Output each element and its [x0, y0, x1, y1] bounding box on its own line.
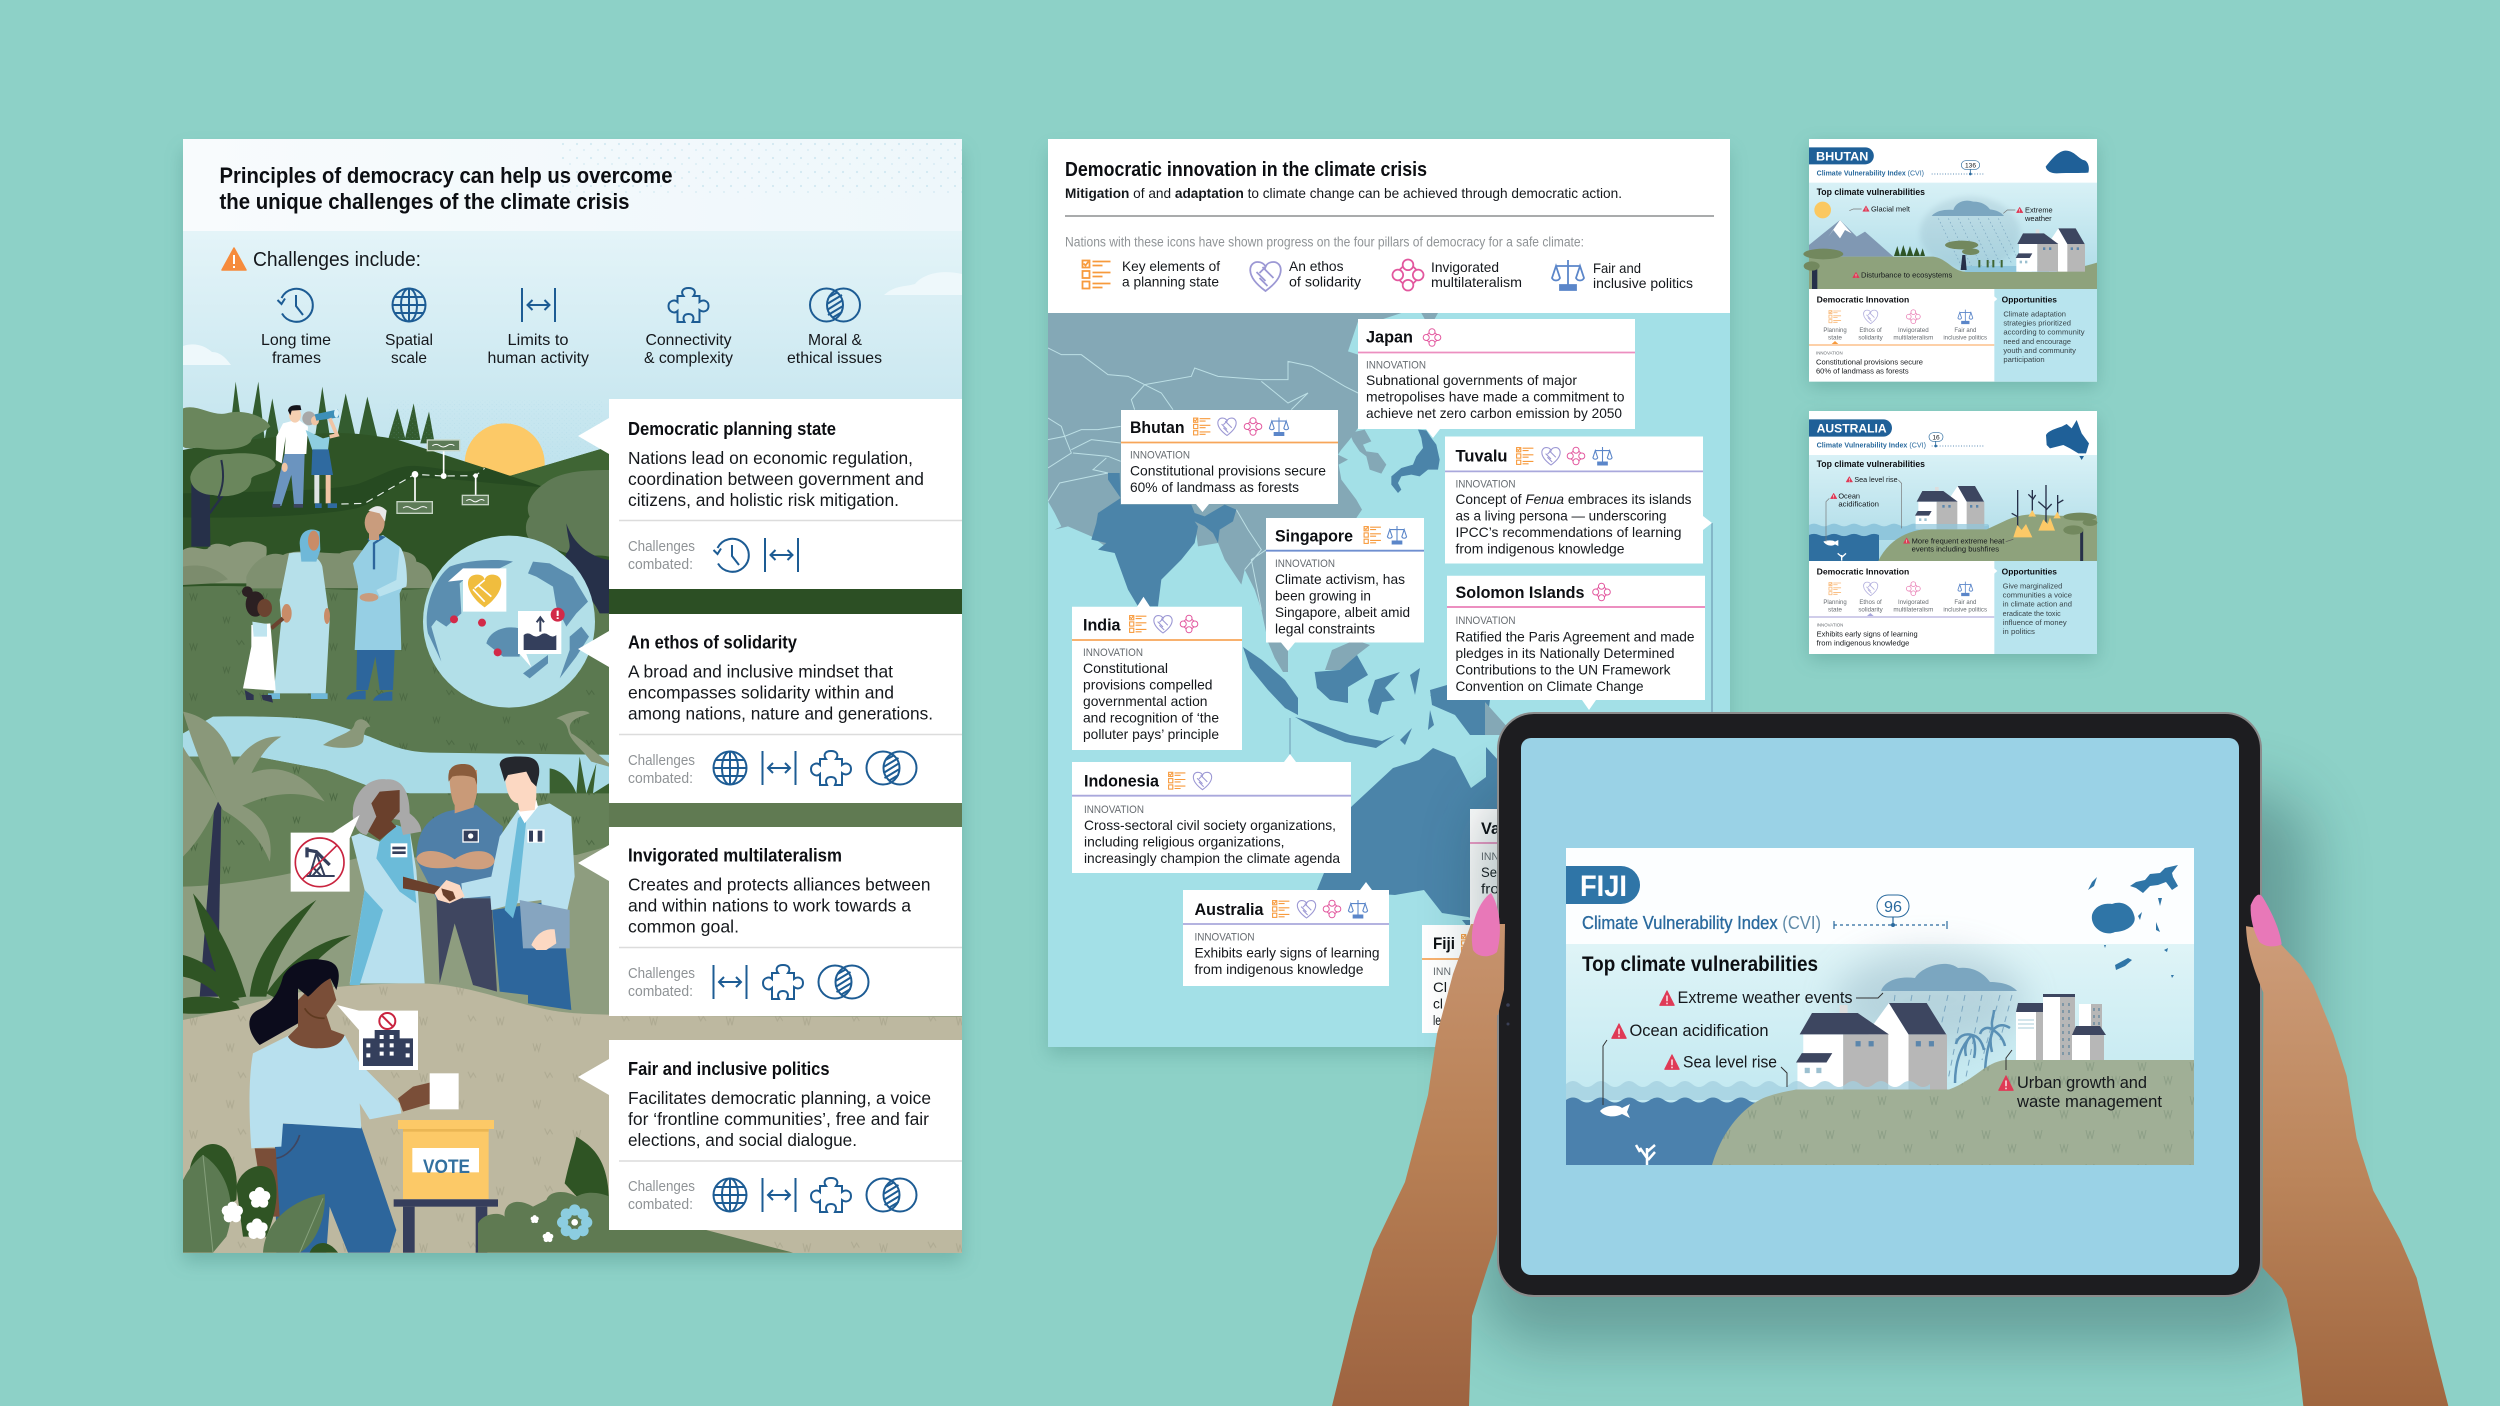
card: Bhutan: Bhutan	[1130, 418, 1184, 437]
opportunities section: Opportunities	[2002, 567, 2057, 577]
index scale: 96	[1884, 899, 1902, 916]
card: Solomon Islands: Ratified the Paris Agreement and made	[1456, 628, 1695, 644]
card: an ethos of solidarity: combated:	[628, 771, 693, 787]
legend: planning state: a planning state	[1122, 274, 1219, 290]
card: Australia	[1183, 882, 1389, 986]
challenge: moral and ethical issues: Moral &	[808, 332, 862, 349]
card: democratic planning state: combated:	[628, 557, 693, 573]
label: glacial melt	[1849, 204, 1910, 213]
left hand	[1332, 924, 1505, 1406]
card: Singapore: legal constraints	[1275, 620, 1375, 636]
panel shadow	[1809, 145, 2097, 387]
map heading: Nations with these icons have shown progress on the four pillars of democracy for a safe climate:	[1065, 234, 1584, 250]
card: Vanuatu: fro	[1481, 880, 1499, 896]
card: Australia: Exhibits early signs of learning	[1194, 945, 1380, 961]
card: democratic planning state: Democratic planning state	[628, 418, 836, 439]
card: India: governmental action	[1083, 693, 1208, 709]
Fiji map	[2088, 865, 2178, 978]
challenge: limits to human activity: Limits to	[508, 332, 569, 349]
legend: solidarity	[1250, 258, 1361, 291]
Bhutan drawing in magnified units	[1803, 139, 2097, 382]
card: fair and inclusive politics: Fair and inclusive politics	[628, 1058, 830, 1079]
label: extreme weather	[2003, 206, 2053, 223]
card: invigorated multilateralism: Creates and protects alliances between	[628, 874, 930, 894]
challenge: moral and ethical issues	[787, 288, 882, 367]
Bhutan landscape	[1803, 197, 2097, 289]
title: Principles of democracy can help us overcome	[220, 163, 672, 188]
card: Solomon Islands: INNOVATION	[1456, 615, 1516, 627]
democratic innovation section: Ethos of	[1859, 600, 1882, 606]
card: Tuvalu	[1445, 436, 1712, 712]
opportunities section: participation	[2003, 357, 2045, 364]
card: Japan: Japan	[1366, 328, 1413, 346]
name pill	[1809, 419, 1892, 437]
globe with speech bubbles	[423, 536, 595, 708]
panel: principles of democracy	[180, 139, 963, 1263]
name: AUSTRALIA	[1817, 422, 1887, 436]
label: ocean acidification: Ocean acidification	[1630, 1021, 1768, 1040]
card: Singapore: Singapore	[1275, 526, 1353, 546]
index scale: 136	[1965, 162, 1976, 169]
right thumb over tablet edge	[2246, 895, 2313, 1017]
opportunities section: in climate action and	[2003, 602, 2072, 609]
challenge: connectivity and complexity	[644, 288, 733, 367]
card: India: INNOVATION	[1083, 647, 1143, 659]
card: Singapore: Climate activism, has	[1275, 571, 1405, 587]
democratic innovation section	[1809, 295, 1994, 375]
climate vulnerability index: Climate Vulnerability Index (CVI)	[1817, 441, 1926, 450]
legend: multilateralism: Invigorated	[1431, 259, 1499, 275]
header background	[1048, 139, 1730, 313]
legend: fair politics: Fair and	[1593, 260, 1641, 276]
challenges heading: Challenges include:	[253, 249, 421, 271]
democratic innovation section: state	[1828, 607, 1843, 613]
democratic innovation section: Invigorated	[1898, 600, 1929, 606]
label: urban growth and waste management: waste management	[2016, 1092, 2162, 1111]
card: Tuvalu: INNOVATION	[1456, 478, 1516, 490]
voter at ballot box	[249, 959, 498, 1253]
opportunities section	[1994, 289, 2097, 382]
democratic innovation section: from indigenous knowledge	[1817, 638, 1909, 647]
card: an ethos of solidarity: among nations, nature and generations.	[628, 704, 933, 724]
card: democratic planning state	[578, 399, 962, 589]
label: ocean acidification	[1826, 492, 1879, 542]
card: Indonesia: Indonesia	[1084, 772, 1160, 791]
democratic innovation section: Democratic Innovation	[1817, 567, 1909, 577]
card: invigorated multilateralism	[578, 827, 962, 1016]
label: sea level rise: Sea level rise	[1683, 1052, 1777, 1072]
label: extreme weather events: Extreme weather events	[1678, 988, 1852, 1007]
card: an ethos of solidarity: A broad and inclusive mindset that	[628, 662, 893, 682]
card: Fiji: Cl	[1433, 979, 1447, 995]
label: glacial melt: Glacial melt	[1871, 204, 1910, 213]
label: sea level rise: Sea level rise	[1854, 475, 1898, 484]
index scale: 16	[1932, 434, 1940, 441]
vulnerabilities heading: Top climate vulnerabilities	[1817, 459, 1925, 469]
challenge: spatial scale: scale	[391, 350, 427, 367]
democratic innovation section: Fair and	[1954, 328, 1976, 334]
democratic innovation section: inclusive politics	[1943, 335, 1987, 341]
card: India: provisions compelled	[1083, 676, 1212, 692]
index scale	[1834, 895, 1947, 929]
democratic innovation section: INNOVATION	[1817, 623, 1843, 628]
label: ocean acidification: acidification	[1838, 500, 1879, 509]
card: an ethos of solidarity: An ethos of solidarity	[628, 632, 798, 652]
challenge: long time frames	[261, 289, 331, 367]
panel shadow	[1048, 150, 1730, 1055]
challenge: limits to human activity	[488, 288, 589, 367]
card: fair and inclusive politics: combated:	[628, 1197, 693, 1213]
democratic innovation section: Constitutional provisions secure	[1816, 357, 1923, 366]
Fiji landscape	[1566, 950, 2194, 1165]
card: Fiji: INN	[1433, 966, 1451, 978]
card: democratic planning state: Nations lead on economic regulation,	[628, 448, 913, 468]
Fiji graphic	[1566, 848, 2194, 1165]
card: invigorated multilateralism: common goal.	[628, 916, 739, 936]
card: democratic planning state: citizens, and holistic risk mitigation.	[628, 490, 899, 510]
climate vulnerability index: Climate Vulnerability Index (CVI)	[1817, 169, 1924, 178]
card: Japan: metropolises have made a commitment to	[1366, 388, 1625, 404]
panel: Bhutan summary	[1803, 139, 2097, 387]
card: invigorated multilateralism: and within nations to work towards a	[628, 896, 911, 916]
name pill	[1809, 147, 1874, 164]
democratic innovation section: Planning	[1823, 328, 1847, 334]
title: the unique challenges of the climate crisis	[220, 189, 630, 214]
opportunities section: in politics	[2003, 629, 2036, 636]
card: Indonesia	[1072, 718, 1351, 873]
card: Bhutan: INNOVATION	[1130, 450, 1190, 462]
map heading: Democratic innovation in the climate crisis	[1065, 159, 1427, 181]
democratic innovation section: solidarity	[1858, 335, 1883, 341]
opportunities section: Opportunities	[2002, 295, 2057, 305]
card: Tuvalu: Concept of Fenua embraces its islands	[1456, 491, 1692, 507]
card: Singapore: INNOVATION	[1275, 558, 1335, 570]
card: India: India	[1083, 616, 1121, 635]
card: Tuvalu: IPCC’s recommendations of learning	[1456, 524, 1682, 540]
name pill	[1566, 866, 1640, 904]
card: Solomon Islands: pledges in its Nationally Determined	[1456, 645, 1674, 661]
card: fair and inclusive politics: for ‘frontline communities’, free and fair	[628, 1109, 929, 1129]
card: Indonesia: INNOVATION	[1084, 804, 1144, 816]
opportunities section	[1994, 561, 2097, 654]
landscape scene	[180, 382, 963, 1263]
card: Singapore: been growing in	[1275, 588, 1371, 604]
card: Fiji: cl	[1433, 996, 1443, 1012]
Bhutan map	[2046, 151, 2089, 173]
label: disturbance to ecosystems: Disturbance to ecosystems	[1861, 271, 1953, 280]
legend: fair politics	[1552, 260, 1693, 291]
challenge: long time frames: frames	[272, 350, 321, 367]
card: Bhutan	[1121, 410, 1338, 512]
panel shadow	[183, 150, 962, 1262]
panel: democratic innovation map	[1048, 139, 1730, 1055]
card: Solomon Islands: Contributions to the UN Framework	[1456, 662, 1671, 678]
panel shadow	[1809, 417, 2097, 660]
democratic innovation section: multilateralism	[1893, 607, 1933, 613]
legend: fair politics: inclusive politics	[1593, 275, 1693, 291]
card: India: polluter pays’ principle	[1083, 726, 1219, 742]
card: fair and inclusive politics: Challenges	[628, 1179, 695, 1195]
democratic innovation section: 60% of landmass as forests	[1816, 366, 1909, 375]
card: Vanuatu: Va	[1481, 819, 1501, 838]
map heading: Mitigation of and adaptation to climate change can be achieved through democratic action.	[1065, 185, 1622, 201]
card: Solomon Islands: Solomon Islands	[1456, 583, 1584, 602]
democratic innovation section: solidarity	[1858, 607, 1883, 613]
card: Tuvalu: as a living persona — underscoring	[1456, 508, 1666, 524]
Australia landscape	[1809, 485, 2097, 561]
card: Fiji: le	[1433, 1012, 1441, 1028]
legend: planning state	[1082, 258, 1220, 290]
mainland Asia with borders, India, Korea and Japan	[1048, 313, 1440, 672]
card: Vanuatu: Se	[1481, 864, 1497, 880]
democratic innovation section: INNOVATION	[1816, 351, 1843, 356]
label: urban growth and waste management: Urban growth and	[2017, 1073, 2147, 1092]
democratic innovation section: Invigorated	[1898, 328, 1929, 334]
card: Japan: INNOVATION	[1366, 360, 1426, 372]
card: Japan: achieve net zero carbon emission by 2050	[1366, 405, 1622, 421]
card: Japan: Subnational governments of major	[1366, 372, 1577, 388]
label: heat and bushfires: events including bushfires	[1912, 545, 1999, 554]
label: extreme weather: weather	[2024, 214, 2052, 223]
challenge: connectivity and complexity: & complexity	[644, 350, 733, 367]
legend: multilateralism: multilateralism	[1431, 274, 1522, 290]
card: democratic planning state: Challenges	[628, 539, 695, 555]
card: India	[1072, 597, 1242, 750]
Australia drawing in magnified units	[1809, 411, 2097, 654]
card: invigorated multilateralism: Challenges	[628, 966, 695, 982]
illustration and panel background	[180, 139, 963, 1263]
tablet body	[1498, 713, 2261, 1296]
tablet screen	[1521, 738, 2239, 1275]
card: invigorated multilateralism: Invigorated multilateralism	[628, 844, 842, 866]
card: invigorated multilateralism: combated:	[628, 984, 693, 1000]
label: ocean acidification: Ocean	[1838, 492, 1860, 501]
democratic innovation section: Ethos of	[1859, 328, 1882, 334]
vote label: VOTE	[423, 1157, 470, 1178]
opportunities section: communities a voice	[2003, 592, 2072, 599]
card: Bhutan: Constitutional provisions secure	[1130, 462, 1326, 478]
card: Vanuatu	[1470, 809, 1510, 929]
card: Bhutan: 60% of landmass as forests	[1130, 479, 1299, 495]
label: heat and bushfires: More frequent extreme heat	[1912, 536, 2004, 545]
opportunities section: Give marginalized	[2003, 583, 2062, 590]
bottom foliage and flowers	[183, 1137, 793, 1253]
card: Australia: Australia	[1194, 900, 1264, 919]
building speech bubble	[337, 1005, 418, 1070]
index scale	[1932, 161, 1985, 175]
family group	[242, 506, 407, 703]
label: extreme weather: Extreme	[2025, 206, 2053, 215]
card: Australia: INNOVATION	[1194, 932, 1255, 944]
card: Indonesia: increasingly champion the climate agenda	[1084, 850, 1340, 866]
card: fair and inclusive politics: elections, and social dialogue.	[628, 1130, 857, 1150]
card: Indonesia: Cross-sectoral civil society organizations,	[1084, 817, 1336, 833]
challenge: spatial scale	[385, 288, 433, 367]
card: India: Constitutional	[1083, 660, 1168, 676]
panel: Australia summary	[1809, 411, 2097, 660]
challenge: long time frames: Long time	[261, 332, 331, 349]
card: an ethos of solidarity: encompasses solidarity within and	[628, 682, 894, 702]
card: Singapore: Singapore, albeit amid	[1275, 604, 1410, 620]
legend: planning state: Key elements of	[1122, 258, 1220, 274]
right hand	[2246, 926, 2448, 1406]
tablet shadow	[1480, 790, 2310, 1345]
oil pump speech bubble	[291, 815, 360, 892]
democratic innovation section	[1809, 567, 1994, 647]
card: Australia: from indigenous knowledge	[1194, 961, 1364, 977]
left finger over tablet edge	[1463, 893, 1505, 1015]
card: Tuvalu: from indigenous knowledge	[1456, 540, 1625, 556]
opportunities section: need and encourage	[2003, 339, 2071, 346]
card: an ethos of solidarity: Challenges	[628, 753, 695, 769]
card: Fiji	[1422, 925, 1512, 1033]
map of Asia Pacific	[1048, 313, 1730, 1047]
label: ocean acidification	[1603, 1021, 1768, 1105]
challenge: moral and ethical issues: ethical issues	[787, 350, 882, 367]
card: Singapore	[1266, 518, 1424, 651]
legend: solidarity: of solidarity	[1289, 274, 1361, 290]
name: FIJI	[1580, 870, 1627, 903]
climate vulnerability index: Climate Vulnerability Index (CVI)	[1582, 913, 1821, 933]
label: sea level rise	[1846, 475, 1902, 528]
index scale	[1929, 433, 1985, 447]
card: Solomon Islands	[1447, 576, 1705, 710]
democratic innovation section: inclusive politics	[1943, 607, 1987, 613]
card: fair and inclusive politics	[578, 1040, 962, 1230]
opportunities section: Climate adaptation	[2003, 311, 2066, 318]
foreground plants	[183, 893, 351, 1014]
challenge: spatial scale: Spatial	[385, 332, 433, 349]
name: BHUTAN	[1816, 150, 1868, 164]
card: fair and inclusive politics: Facilitates democratic planning, a voice	[628, 1088, 931, 1108]
challenge: limits to human activity: human activity	[488, 350, 589, 367]
card: India: and recognition of ‘the	[1083, 710, 1219, 726]
legend: multilateralism	[1392, 259, 1522, 291]
democratic innovation section: Fair and	[1954, 600, 1976, 606]
democratic innovation section: multilateralism	[1893, 335, 1933, 341]
democratic innovation section: Exhibits early signs of learning	[1817, 629, 1918, 638]
title	[220, 163, 672, 214]
card: Fiji: Fiji	[1433, 934, 1455, 953]
opportunities section: according to community	[2003, 330, 2085, 337]
trail with markers	[341, 440, 488, 513]
opportunities section: influence of money	[2003, 620, 2067, 627]
democratic innovation section: Planning	[1823, 600, 1847, 606]
hiker with binoculars couple	[272, 405, 339, 508]
officials shaking hands	[350, 756, 575, 1010]
label: heat and bushfires	[1903, 536, 2013, 554]
label: sea level rise	[1665, 1052, 1787, 1087]
card: Japan	[1358, 319, 1635, 438]
card: an ethos of solidarity	[578, 614, 962, 803]
challenge: connectivity and complexity: Connectivity	[646, 332, 732, 349]
opportunities section: eradicate the toxic	[2003, 611, 2061, 618]
card: Tuvalu: Tuvalu	[1456, 446, 1508, 466]
democratic innovation section: state	[1828, 335, 1843, 341]
vulnerabilities heading: Top climate vulnerabilities	[1817, 187, 1925, 197]
card: Vanuatu: INN	[1481, 851, 1499, 863]
tablet	[1498, 713, 2261, 1296]
democratic innovation section: Democratic Innovation	[1817, 295, 1909, 305]
opportunities section: youth and community	[2003, 348, 2077, 355]
legend: solidarity: An ethos	[1289, 258, 1344, 274]
tablet buttons	[1506, 1003, 1510, 1026]
card: democratic planning state: coordination between government and	[628, 469, 924, 489]
card: Indonesia: including religious organizations,	[1084, 834, 1284, 850]
opportunities section: strategies prioritized	[2003, 320, 2071, 327]
card: Solomon Islands: Convention on Climate Change	[1456, 678, 1644, 694]
label: urban growth and waste management	[1999, 1050, 2162, 1111]
Australia map	[2046, 420, 2089, 460]
vulnerabilities heading: Top climate vulnerabilities	[1582, 953, 1818, 976]
map heading	[1065, 159, 1714, 250]
